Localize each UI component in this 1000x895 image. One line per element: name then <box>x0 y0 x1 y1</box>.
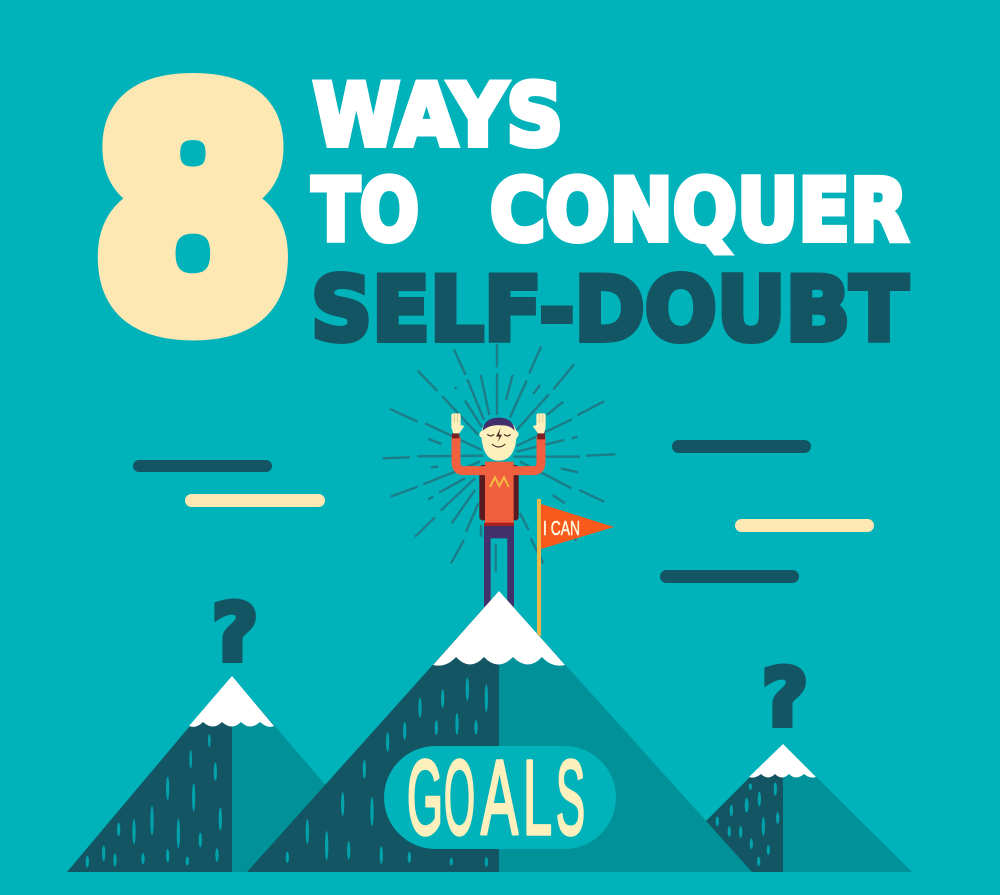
head <box>481 420 517 461</box>
left hand <box>451 413 464 433</box>
nose <box>496 428 502 442</box>
backpack <box>479 465 519 520</box>
title: TO CONQUER: TO <box>312 161 419 261</box>
title: TO CONQUER: CONQUER <box>490 161 908 261</box>
arms <box>456 437 541 471</box>
flag text: I CAN <box>543 518 580 540</box>
goals badge: S <box>556 739 585 857</box>
title: SELF-DOUBT: SELF-DOUBT <box>311 258 908 361</box>
goals label: L <box>523 739 552 857</box>
right mountain snow cap <box>749 744 816 778</box>
title: WAYS: WAYS <box>313 66 563 166</box>
right hand <box>533 413 546 433</box>
cloud lines right <box>660 440 874 583</box>
goals badge <box>384 739 616 857</box>
belt <box>484 523 514 526</box>
central mountain texture <box>286 677 488 867</box>
finger separations <box>454 414 543 423</box>
ears <box>479 431 519 438</box>
left mountain snow cap <box>189 676 274 727</box>
legs <box>484 525 514 607</box>
question mark left: ? <box>212 589 258 679</box>
goals label: O <box>444 739 475 857</box>
left mountain <box>67 676 400 872</box>
flag <box>537 499 614 636</box>
hair <box>483 418 515 431</box>
sweater logo <box>490 477 509 487</box>
title numeral 8: 8 <box>94 31 292 396</box>
goals label: A <box>481 739 518 857</box>
icon: radiating rays <box>383 344 615 572</box>
right mountain texture <box>716 782 779 866</box>
left mountain texture <box>86 734 222 868</box>
right mountain <box>655 744 912 872</box>
central mountain snow cap <box>433 591 565 666</box>
central mountain <box>247 591 752 872</box>
cloud lines left <box>133 460 325 507</box>
torso <box>485 462 514 523</box>
face <box>487 434 511 447</box>
question mark right: ? <box>762 654 808 744</box>
goals label: G <box>407 739 443 857</box>
cuffs <box>452 433 545 439</box>
person with backpack <box>451 413 546 607</box>
